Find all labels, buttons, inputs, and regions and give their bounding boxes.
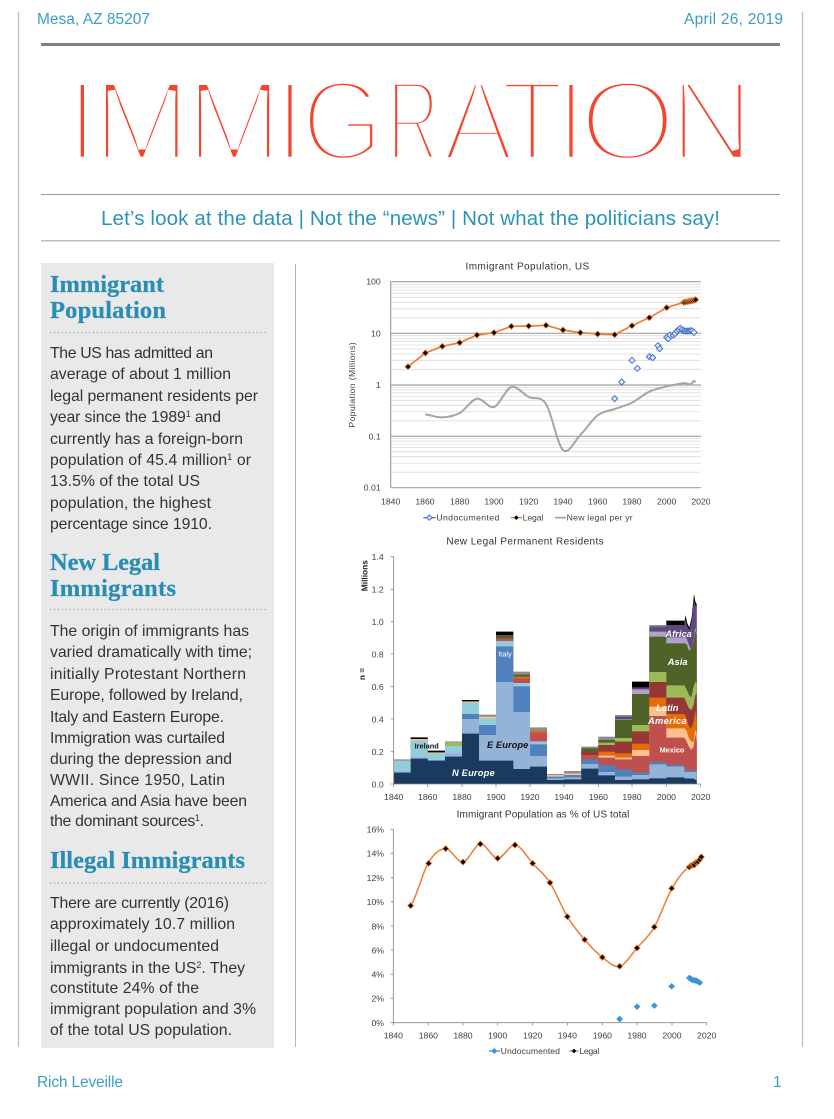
x axis labels: 1920: [519, 496, 538, 506]
legend: Undocumented: [436, 513, 500, 523]
x axis labels: [381, 496, 711, 506]
header location: Mesa, AZ 85207: [37, 11, 150, 28]
region labels: [415, 629, 692, 778]
legend: [489, 1046, 599, 1056]
x axis labels: 1840: [384, 792, 403, 802]
x axis labels: 1980: [627, 1031, 647, 1041]
region labels: America: [647, 716, 687, 726]
legend: New legal per yr: [567, 513, 633, 523]
stacked area: [394, 594, 697, 784]
section: new legal immigrants: varied dramatically with time;: [50, 644, 252, 661]
y axis labels: 16%: [367, 825, 384, 835]
section: immigrant population: 1: [186, 409, 191, 419]
title: T: [501, 57, 564, 186]
section: new legal immigrants: initially Protestant Northern: [50, 666, 246, 683]
series: legal points: [411, 844, 701, 966]
section: illegal immigrants: 2: [196, 960, 201, 970]
footer author: Rich Leveille: [37, 1074, 123, 1091]
region labels: Mexico: [660, 746, 685, 755]
x axis labels: 1880: [453, 1031, 473, 1041]
x axis labels: [384, 1031, 716, 1041]
x axis labels: 1860: [418, 792, 437, 802]
y axis labels: 0.1: [369, 431, 381, 441]
section: illegal immigrants: immigrant population and 3%: [50, 1001, 256, 1018]
rule under subtitle: [41, 240, 780, 242]
x axis labels: 1840: [384, 1031, 403, 1041]
x axis labels: 1980: [622, 792, 642, 802]
y axis labels: [364, 277, 381, 493]
title: G: [301, 57, 384, 185]
y axis labels: 6%: [371, 945, 384, 955]
section: new legal immigrants: 1: [195, 813, 200, 823]
section: illegal immigrants: approximately 10.7 million: [50, 916, 235, 933]
title: I: [555, 58, 587, 186]
section: illegal immigrants: [50, 847, 266, 1039]
y axis labels: 1.2: [372, 585, 384, 595]
y axis title: Population (Millions): [347, 342, 357, 428]
section: new legal immigrants: America and Asia have been: [50, 793, 247, 810]
column divider: [295, 264, 296, 1047]
section: immigrant population: Population: [50, 297, 166, 324]
y axis labels: 12%: [367, 873, 384, 883]
y axis labels: 0.2: [372, 747, 384, 757]
section: immigrant population: 13.5% of the total US: [50, 473, 200, 490]
y axis labels: 14%: [367, 849, 384, 859]
y axis labels: [372, 552, 384, 789]
section: immigrant population: [50, 271, 266, 533]
region labels: N Europe: [452, 768, 495, 778]
x axis labels: 2020: [691, 496, 711, 506]
section: illegal immigrants: illegal or undocumented: [50, 938, 219, 955]
x axis labels: 1900: [488, 1031, 507, 1041]
y axis labels: 0%: [371, 1018, 384, 1028]
y axis labels: [367, 825, 384, 1028]
x axis labels: 1920: [520, 792, 540, 802]
title: R: [387, 58, 440, 186]
region labels: E Europe: [487, 740, 528, 750]
section: new legal immigrants: Immigration was curtailed: [50, 730, 225, 747]
section: immigrant population: average of about 1 million: [50, 366, 231, 383]
region labels: Italy: [498, 650, 512, 659]
section: new legal immigrants: Italy and Eastern Europe.: [50, 709, 224, 726]
section: immigrant population: population of 45.4 million: [50, 452, 227, 469]
rule under title: [41, 194, 780, 195]
x axis labels: 1860: [419, 1031, 438, 1041]
x axis labels: 1900: [486, 792, 506, 802]
region labels: Ireland: [415, 742, 439, 751]
y axis labels: 10%: [367, 897, 384, 907]
section: immigrant population: currently has a foreign-born: [50, 431, 243, 448]
y axis labels: 2%: [371, 994, 384, 1004]
legend: Legal: [579, 1046, 599, 1056]
section: new legal immigrants: Immigrants: [50, 575, 176, 602]
section: new legal immigrants: WWII. Since 1950, Latin: [50, 772, 225, 789]
x axis labels: 2000: [657, 496, 676, 506]
y axis labels: 10: [371, 328, 381, 338]
subtitle: Let’s look at the data | Not the “news” | Not what the politicians say!: [101, 207, 720, 230]
x axis labels: 1880: [450, 496, 469, 506]
legend: Legal: [523, 513, 543, 523]
title: [66, 56, 754, 186]
section: new legal immigrants: New Legal: [50, 549, 160, 576]
series: legal: [408, 300, 696, 367]
x axis labels: [384, 792, 710, 802]
title: M: [186, 57, 282, 185]
section: immigrant population: percentage since 1910.: [50, 516, 212, 533]
y axis labels: 1.4: [372, 552, 384, 562]
title: I: [274, 58, 306, 186]
y axis title: Millions: [359, 560, 369, 591]
chart title: New Legal Permanent Residents: [446, 536, 604, 547]
x axis labels: 1940: [554, 792, 574, 802]
x axis labels: 2000: [657, 792, 676, 802]
y axis labels: 0.8: [372, 649, 384, 659]
y axis labels: 1: [376, 380, 381, 390]
section: illegal immigrants: of the total US population.: [50, 1022, 232, 1039]
series: undocumented: [615, 328, 694, 399]
x axis labels: 1960: [588, 496, 607, 506]
x axis labels: 1960: [593, 1031, 612, 1041]
section: immigrant population: and: [191, 409, 221, 426]
header date: April 26, 2019: [684, 11, 783, 28]
n = label: n =: [357, 668, 367, 680]
x axis labels: 1980: [622, 496, 642, 506]
section: immigrant population: legal permanent residents per: [50, 388, 258, 405]
section: immigrant population: or: [232, 452, 251, 469]
footer page number: 1: [773, 1074, 782, 1091]
section: illegal immigrants: immigrants in the US: [50, 960, 196, 977]
section: new legal immigrants: the dominant sources: [50, 813, 195, 830]
series: new legal per year: [425, 381, 696, 451]
title: A: [443, 56, 514, 185]
title: N: [669, 57, 754, 185]
y axis labels: 8%: [371, 921, 384, 931]
x axis labels: 2020: [697, 1031, 716, 1041]
section: new legal immigrants: .: [200, 813, 204, 830]
legend: [423, 513, 633, 523]
title: M: [92, 56, 191, 185]
title: O: [579, 57, 677, 185]
top rule: [41, 43, 780, 46]
y axis labels: 100: [366, 277, 381, 287]
axes: [391, 557, 701, 787]
section: immigrant population: Immigrant: [50, 271, 165, 298]
section: immigrant population: 1: [227, 452, 232, 462]
region labels: Latin: [656, 703, 679, 713]
chart: new legal permanent residents: [357, 536, 710, 802]
section: new legal immigrants: Europe, followed by Ireland,: [50, 687, 243, 704]
region labels: Africa: [664, 629, 692, 639]
panel: sidebar: [41, 263, 274, 1048]
series: legal line: [411, 844, 701, 967]
section: immigrant population: population, the highest: [50, 495, 212, 512]
y axis labels: 0.4: [372, 714, 384, 724]
chart: immigrant population as % of US total: [367, 810, 716, 1056]
section: illegal immigrants: constitute 24% of the: [50, 980, 199, 997]
legend: Undocumented: [501, 1046, 560, 1056]
title: I: [66, 58, 98, 186]
chart title: Immigrant Population, US: [465, 261, 589, 272]
x axis labels: 1840: [381, 496, 400, 506]
x axis labels: 1860: [415, 496, 435, 506]
section: illegal immigrants: . They: [201, 960, 245, 977]
section: new legal immigrants: during the depression and: [50, 751, 232, 768]
x axis labels: 1900: [484, 496, 504, 506]
x axis labels: 1960: [589, 792, 608, 802]
section: new legal immigrants: The origin of immigrants has: [50, 623, 249, 640]
section: immigrant population: year since the 1989: [50, 409, 186, 426]
x axis labels: 1940: [558, 1031, 577, 1041]
y axis labels: 4%: [371, 970, 384, 980]
chart title: Immigrant Population as % of US total: [457, 810, 629, 821]
section: illegal immigrants: Illegal Immigrants: [50, 847, 245, 874]
x axis labels: 1880: [452, 792, 472, 802]
y axis labels: 1.0: [372, 617, 384, 627]
axes: [391, 829, 707, 1025]
y axis labels: 0.0: [372, 779, 384, 789]
x axis labels: 2000: [662, 1031, 682, 1041]
y axis labels: 0.01: [364, 483, 381, 493]
region labels: Asia: [667, 657, 688, 667]
y axis labels: 0.6: [372, 682, 384, 692]
section: immigrant population: The US has admitted an: [50, 345, 213, 362]
section: illegal immigrants: There are currently (2016): [50, 895, 229, 912]
x axis labels: 1920: [523, 1031, 542, 1041]
section: new legal immigrants: [50, 549, 266, 830]
chart: immigrant population, US: [347, 261, 711, 523]
series: undocumented points: [620, 978, 700, 1019]
x axis labels: 1940: [553, 496, 573, 506]
x axis labels: 2020: [691, 792, 710, 802]
